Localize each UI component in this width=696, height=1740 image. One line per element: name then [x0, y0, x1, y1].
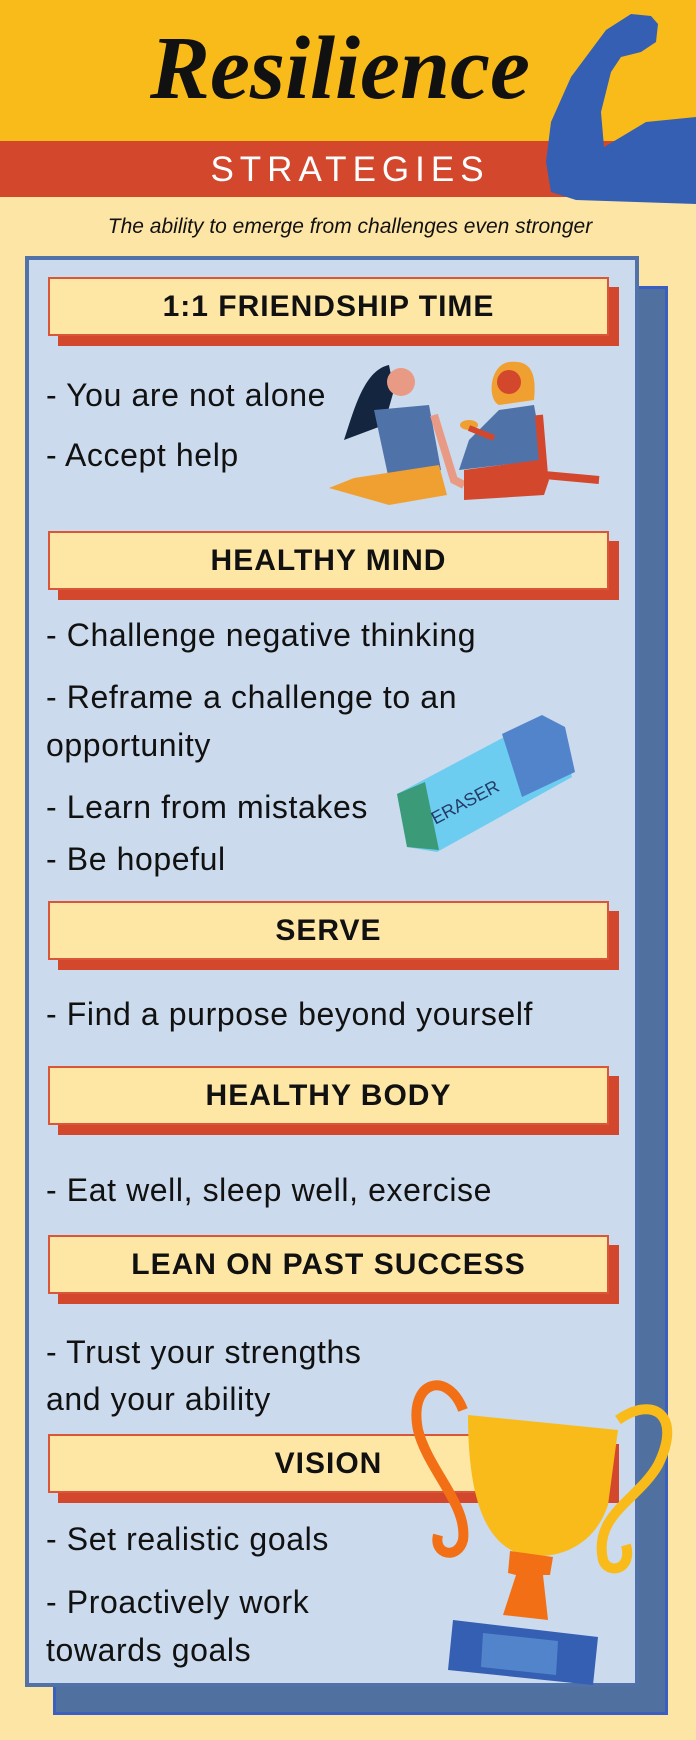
title: Resilience: [150, 19, 530, 118]
header: healthy mind: HEALTHY MIND: [211, 544, 446, 577]
header: past success: [48, 1235, 619, 1304]
back panel: [53, 286, 668, 1715]
main panel: [25, 256, 639, 1687]
red strategies band: [0, 141, 696, 197]
header: vision: VISION: [275, 1447, 382, 1480]
top yellow band: [0, 0, 696, 141]
header: vision: [48, 1434, 619, 1503]
header: friendship: [48, 277, 619, 346]
illustration: eraser: [397, 715, 575, 852]
header: past success: LEAN ON PAST SUCCESS: [131, 1248, 526, 1281]
subtitle band text: STRATEGIES: [210, 150, 490, 189]
header: friendship: 1:1 FRIENDSHIP TIME: [163, 290, 494, 323]
text: past success: - Trust your strengths: [46, 1334, 362, 1370]
text: - Proactively work: [46, 1584, 309, 1620]
text: towards goals: [46, 1632, 251, 1668]
tagline: The ability to emerge from challenges even stronger: [108, 215, 592, 238]
header: serve: SERVE: [275, 914, 382, 947]
illustration: eraser: ERASER: [428, 776, 502, 828]
header: serve: [48, 901, 619, 970]
text: healthy mind: - Challenge negative thinking: [46, 617, 476, 653]
text: friendship: - You are not alone: [46, 377, 326, 413]
text: - Reframe a challenge to an: [46, 679, 457, 715]
illustration: trophy: [411, 1380, 672, 1685]
illustration: two friends: [329, 362, 600, 505]
text: - Accept help: [46, 437, 239, 473]
text: and your ability: [46, 1381, 271, 1417]
text: - Learn from mistakes: [46, 789, 368, 825]
text: serve: - Find a purpose beyond yourself: [46, 996, 533, 1032]
text: vision: - Set realistic goals: [46, 1521, 329, 1557]
text: opportunity: [46, 727, 211, 763]
header: healthy body: HEALTHY BODY: [206, 1079, 451, 1112]
icon: flexed arm: [546, 14, 696, 204]
header: healthy mind: [48, 531, 619, 600]
text: healthy body: - Eat well, sleep well, exercise: [46, 1172, 492, 1208]
text: - Be hopeful: [46, 841, 226, 877]
header: healthy body: [48, 1066, 619, 1135]
